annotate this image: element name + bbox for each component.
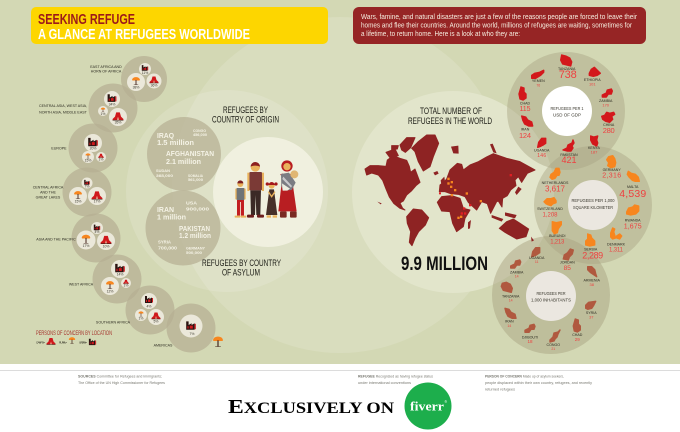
center: refugees per 1 USD of GDP: USD OF GDP: [553, 112, 581, 118]
countries: per inhabitants: UGANDA: [529, 256, 545, 260]
southern africa: [96, 286, 174, 334]
east africa and horn of africa: 38%: [133, 86, 139, 90]
title banner: [31, 7, 328, 44]
countries: per square kilometer: DENMARK: [607, 242, 626, 246]
asia and the pacific: 17%: [83, 244, 89, 248]
large background circle: [172, 17, 508, 353]
countries: per GDP: CHINA: [603, 123, 615, 127]
asylum bubble: 500,000: [186, 251, 202, 255]
countries: per inhabitants: 11: [535, 260, 539, 264]
central africa and the great lakes: GREAT LAKES: [36, 195, 61, 199]
central asia, west asia, north asia, middle east: NORTH ASIA, MIDDLE EAST: [39, 110, 88, 114]
east africa and horn of africa: HORN OF AFRICA: [91, 70, 122, 74]
asylum bubble: PAKISTAN: [179, 226, 210, 233]
origin bubble: SUDAN: [156, 169, 171, 173]
footer: person of concern definition: people displaced within their own country, refugees, and recently: [485, 380, 592, 385]
countries: per square kilometer: MALTA: [627, 185, 639, 189]
title banner: SEEKING REFUGE: [38, 12, 135, 28]
southern africa: 4%: [147, 304, 151, 308]
countries: per inhabitants: 18: [527, 339, 533, 344]
countries: per GDP: TANZANIA: [558, 67, 576, 71]
countries: per inhabitants: JORDAN: [560, 260, 575, 264]
asylum bubble: GERMANY: [186, 246, 206, 250]
panel: refugees by country of origin and asylum: [146, 105, 323, 278]
americas: AMERICAS: [154, 343, 173, 347]
mother and baby: [278, 160, 298, 218]
heading: refugees by country of origin: REFUGEES BY: [223, 105, 268, 116]
center: refugees per 1,000 inhabitants: 1,000 INHABITANTS: [531, 298, 571, 302]
heading: total number of refugees in the world: [408, 106, 492, 127]
asylum bubble: SYRIA: [158, 240, 172, 244]
countries: per square kilometer: SWITZERLAND: [537, 207, 563, 211]
heading: refugees by country of origin: [212, 105, 279, 126]
intro text box: [353, 7, 646, 44]
countries: per square kilometer: 1,213: [550, 240, 565, 246]
footer divider: [0, 370, 680, 371]
countries: per square kilometer: [537, 156, 646, 260]
countries: per inhabitants: CHAD: [572, 333, 583, 337]
countries: per square kilometer: SERBIA: [584, 248, 598, 252]
countries: per square kilometer: 1,311: [609, 248, 624, 254]
central asia, west asia, north asia, middle east: 1%: [101, 112, 105, 116]
asylum bubble: 900,000: [186, 206, 210, 212]
center: refugees per 1,000 square kilometer: REFUGEES PER 1,000: [572, 198, 615, 203]
asia and the pacific: [36, 214, 120, 262]
intro text box: Wars, famine, and natural disasters are just a few of the reasons people are forced to leave their: [361, 14, 638, 21]
countries: per GDP: 187: [591, 150, 598, 154]
countries: per inhabitants: 37: [589, 314, 594, 320]
countries: per inhabitants: DJIBOUTI: [522, 336, 538, 340]
asylum bubble: 1.2 million: [179, 233, 211, 240]
countries: per GDP: IRAN: [521, 128, 530, 132]
countries: per inhabitants: [501, 248, 600, 351]
east africa and horn of africa: [90, 56, 167, 102]
countries: per GDP: 738: [559, 69, 577, 81]
intro text box: homes and flee their countries. Around the world, millions of refugees are waiting, sometimes for: [361, 22, 633, 30]
footer: refugee definition: REFUGEE Recognized as having refugee status: [358, 374, 433, 378]
west africa: WEST AFRICA: [69, 282, 94, 286]
central asia, west asia, north asia, middle east: [39, 84, 138, 132]
east africa and horn of africa: EAST AFRICA AND: [90, 65, 122, 69]
girl: [266, 182, 278, 218]
countries: per inhabitants: TANZANIA: [502, 294, 520, 298]
east africa and horn of africa: 11%: [142, 71, 148, 75]
footer: person of concern definition: [485, 374, 592, 392]
countries: per square kilometer: RWANDA: [625, 218, 641, 222]
west africa: 1%: [124, 284, 128, 288]
countries: per square kilometer: NETHERLANDS: [542, 181, 569, 185]
countries: per square kilometer: 2,289: [582, 250, 603, 260]
countries: per square kilometer: 1,208: [542, 212, 558, 218]
europe: 20%: [90, 146, 96, 150]
countries: per square kilometer: 1,675: [624, 224, 642, 230]
west africa: 12%: [107, 290, 113, 294]
world map: [365, 135, 535, 246]
ring: per inhabitants: [492, 236, 610, 354]
west africa: 14%: [117, 272, 123, 276]
countries: per GDP: UGANDA: [534, 148, 550, 152]
central africa and the great lakes: 17%: [94, 200, 100, 204]
title banner: A GLANCE AT REFUGEES WORLDWIDE: [38, 27, 250, 43]
central asia, west asia, north asia, middle east: 34%: [109, 102, 115, 106]
asylum bubble: USA: [186, 200, 198, 206]
countries: per GDP: 115: [520, 106, 531, 113]
heading: total number of refugees in the world: REFUGEES IN THE WORLD: [408, 116, 492, 127]
legend: URBAN =: [79, 340, 87, 344]
heading: total number of refugees in the world: TOTAL NUMBER OF: [420, 106, 482, 117]
countries: per GDP: [519, 55, 615, 165]
countries: per square kilometer: 2,316: [602, 172, 621, 180]
central africa and the great lakes: AND THE: [40, 190, 56, 194]
central africa and the great lakes: CENTRAL AFRICA: [33, 185, 64, 189]
countries: per inhabitants: 29: [575, 337, 580, 342]
asia and the pacific: ASIA AND THE PACIFIC: [36, 237, 76, 241]
origin bubble: 561,000: [188, 178, 203, 182]
europe: 1%: [99, 158, 103, 162]
east africa and horn of africa: 36%: [151, 84, 157, 88]
origin bubble: CONGO: [193, 129, 206, 133]
asylum bubble: [146, 190, 220, 266]
footer: sources: [78, 374, 165, 385]
countries: per GDP: 124: [519, 131, 531, 140]
footer: sources: The Office of the UN High Commissioner for Refugees: [78, 380, 165, 385]
footer: refugee definition: [358, 374, 433, 385]
origin bubble: 368,000: [156, 174, 173, 178]
asia and the pacific: 4%: [95, 230, 99, 234]
asylum bubble: IRAN: [157, 205, 174, 214]
center: refugees per 1,000 inhabitants: [526, 271, 576, 321]
americas: [154, 304, 223, 352]
total figure: 9.9 million: 9.9 MILLION: [401, 254, 488, 275]
countries: per square kilometer: BURUNDI: [549, 234, 565, 238]
countries: per GDP: ETHIOPIA: [584, 78, 601, 82]
panel: persons of concern by location: [33, 56, 223, 352]
footer: person of concern definition: PERSON OF CONCERN Made up of asylum seekers,: [485, 374, 564, 378]
origin bubble: 456,000: [193, 133, 207, 137]
southern africa: 5%: [154, 320, 158, 324]
asia and the pacific: 10%: [103, 244, 109, 248]
countries: per inhabitants: 14: [509, 298, 513, 302]
fiverr badge: ®: [444, 400, 448, 404]
countries: per GDP: KENYA: [588, 146, 601, 150]
countries: per GDP: YEMEN: [532, 79, 545, 83]
exclusively on label: EXCLUSIVELY ON: [228, 396, 394, 418]
countries: per square kilometer: GERMANY: [603, 168, 621, 172]
west africa: [69, 254, 142, 304]
countries: per inhabitants: ARMENIA: [584, 278, 600, 282]
countries: per inhabitants: 85: [564, 265, 571, 272]
legend: PERSONS OF CONCERN BY LOCATION: [36, 331, 112, 337]
footer: refugee definition: under international conventions: [358, 380, 411, 385]
footer: sources: SOURCES Committee for Refugees and Immigrants;: [78, 374, 162, 378]
southern africa: 1%: [139, 316, 143, 320]
legend: CAMPS =: [36, 340, 45, 344]
central asia, west asia, north asia, middle east: CENTRAL ASIA, WEST ASIA,: [39, 104, 87, 108]
asylum and origin outer circle: [126, 90, 328, 292]
countries: per GDP: PAKISTAN: [560, 153, 578, 157]
central asia, west asia, north asia, middle east: 35%: [115, 120, 121, 124]
family illustration: [213, 137, 323, 247]
footer: person of concern definition: returned refugees: [485, 386, 515, 392]
countries: per GDP: CHAD: [520, 102, 530, 106]
center: refugees per 1,000 square kilometer: [568, 180, 618, 230]
countries: per inhabitants: 14: [515, 274, 519, 278]
southern africa: SOUTHERN AFRICA: [96, 320, 131, 324]
intro text box: a lifetime, to return home. Here is a look at who they are:: [361, 31, 520, 38]
ring: per square kilometer: [534, 146, 652, 264]
asylum bubble: 1 million: [157, 214, 186, 222]
origin bubble: 2.1 million: [166, 159, 201, 166]
countries: per inhabitants: 38: [589, 282, 595, 287]
heading: refugees by country of origin: COUNTRY OF ORIGIN: [212, 114, 279, 126]
europe: [51, 124, 118, 172]
legend: [36, 331, 112, 345]
countries: per inhabitants: ZAMBIA: [510, 270, 524, 274]
center: refugees per 1,000 inhabitants: REFUGEES PER: [536, 291, 566, 296]
countries: per inhabitants: CONGO: [547, 343, 560, 347]
fiverr badge: fiverr: [410, 398, 444, 414]
europe: EUROPE: [51, 146, 67, 150]
countries: per GDP: 101: [589, 82, 596, 86]
countries: per inhabitants: 21: [551, 347, 555, 351]
countries: per inhabitants: IRAN: [505, 320, 514, 324]
center: refugees per 1 USD of GDP: [542, 86, 592, 136]
origin bubble: [147, 117, 221, 191]
countries: per inhabitants: SYRIA: [586, 311, 597, 315]
heading: refugees by country of asylum: OF ASYLUM: [222, 268, 260, 278]
countries: per GDP: ZAMBIA: [599, 99, 613, 103]
europe: 15%: [85, 158, 91, 162]
central africa and the great lakes: 7%: [85, 184, 89, 188]
center: refugees per 1 USD of GDP: REFUGEES PER 1: [550, 106, 584, 111]
countries: per inhabitants: 14: [507, 324, 511, 328]
center: refugees per 1,000 square kilometer: SQUARE KILOMETER: [573, 205, 613, 210]
central africa and the great lakes: [33, 168, 112, 216]
heading: refugees by country of asylum: [202, 258, 281, 278]
legend: RURAL =: [59, 340, 67, 344]
boy: [235, 180, 246, 218]
countries: per square kilometer: 3,617: [545, 184, 566, 194]
origin bubble: IRAQ: [157, 131, 174, 140]
world map circle: [352, 91, 554, 293]
countries: per GDP: 280: [603, 126, 615, 135]
origin bubble: SOMALIA: [188, 174, 203, 178]
asylum bubble: 700,000: [158, 246, 178, 250]
countries: per GDP: 170: [602, 102, 610, 108]
countries: per GDP: 421: [562, 155, 576, 165]
ring: per USD of GDP: [507, 52, 625, 170]
fiverr badge: [404, 382, 452, 430]
countries: per GDP: 76: [536, 84, 540, 88]
central africa and the great lakes: 15%: [75, 200, 81, 204]
countries: per GDP: 146: [537, 153, 546, 159]
heading: refugees by country of asylum: REFUGEES BY COUNTRY: [202, 258, 281, 269]
father: [247, 162, 264, 218]
panel: refugee ratio rings: [492, 52, 652, 354]
origin bubble: 1.5 million: [157, 140, 194, 147]
americas: 7%: [190, 332, 194, 336]
origin bubble: AFGHANISTAN: [166, 151, 214, 158]
countries: per square kilometer: 4,539: [619, 188, 646, 200]
